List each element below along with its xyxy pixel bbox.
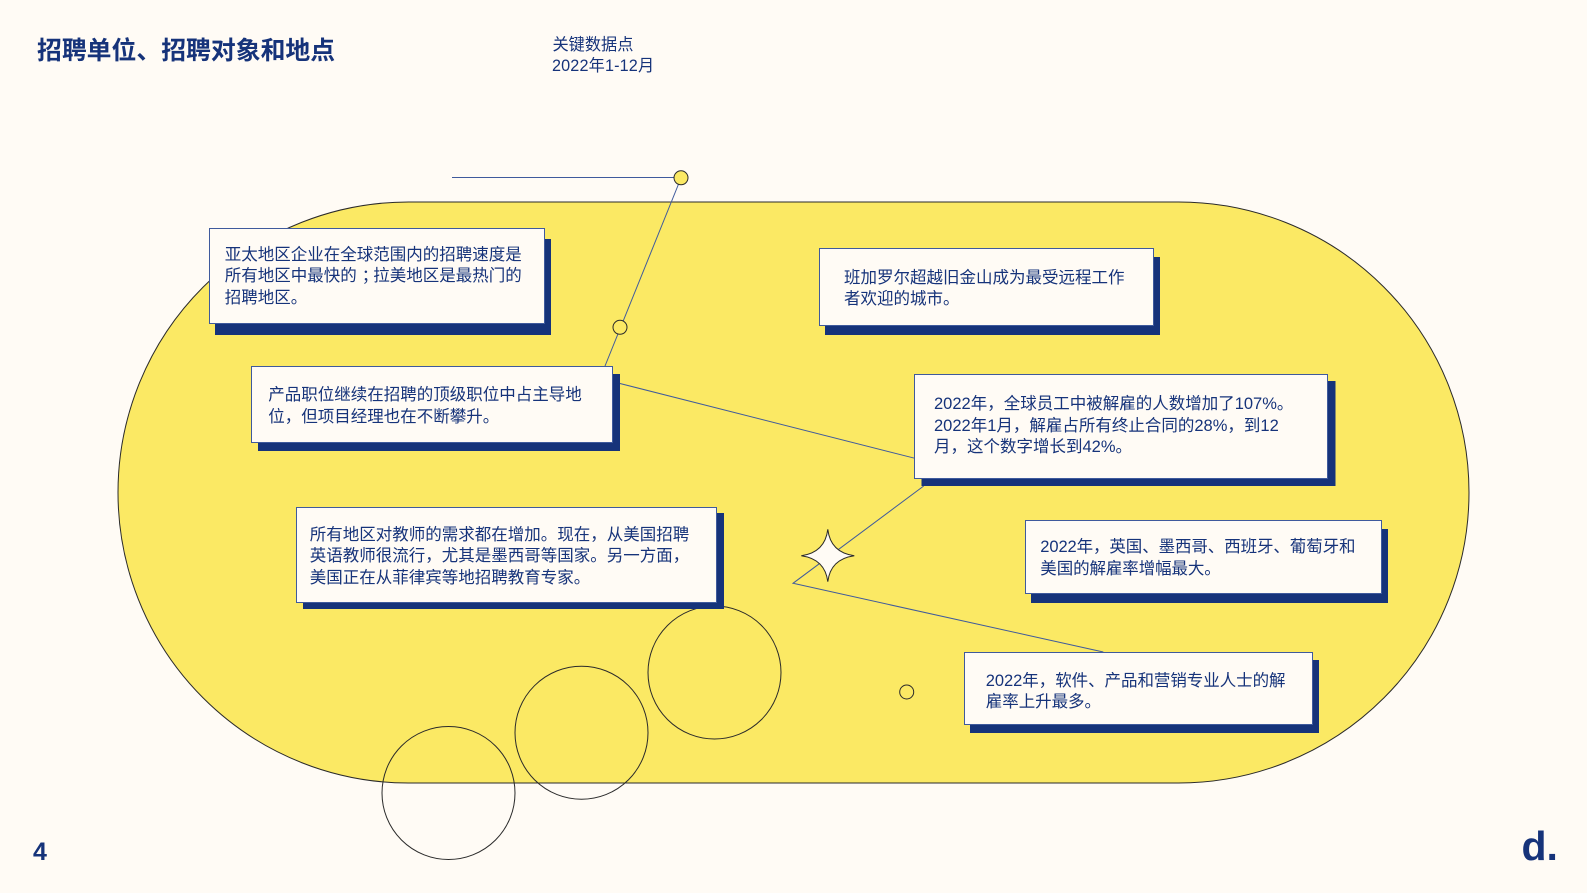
- subtitle: key data points and date range: [552, 36, 654, 75]
- logo: d.: [1522, 823, 1558, 869]
- subtitle: key data points and date range: 关键数据点: [552, 36, 633, 54]
- callout: global layoffs: [914, 374, 1328, 479]
- callout: professions with highest layoff rate: [964, 652, 1312, 725]
- middle connector node: [613, 320, 627, 334]
- callout: countries with biggest layoff increase: [1025, 520, 1382, 594]
- page number: 4: [33, 838, 47, 866]
- top connector node: [674, 171, 688, 185]
- callout text: 所有地区对教师的需求都在增加。现在，从美国招聘: [310, 526, 689, 544]
- icon: four-point star: [801, 529, 854, 582]
- callout text: [986, 672, 1286, 711]
- subtitle: key data points and date range: 2022年1-12月: [552, 57, 654, 75]
- callout: product roles: [251, 366, 613, 443]
- connector lines: [452, 178, 1103, 652]
- callout text: [225, 246, 522, 306]
- callout text: 英语教师很流行，尤其是墨西哥等国家。另一方面，: [310, 547, 689, 565]
- callout text: 2022年，软件、产品和营销专业人士的解: [986, 672, 1286, 690]
- callout text: 班加罗尔超越旧金山成为最受远程工作: [844, 269, 1124, 287]
- callout: Bangalore: [819, 248, 1154, 326]
- callout: Asia-Pacific hiring speed: [209, 228, 545, 324]
- callout text: 2022年，全球员工中被解雇的人数增加了107%。: [934, 395, 1293, 413]
- callout text: [310, 526, 689, 587]
- callout: teacher demand: [296, 507, 717, 603]
- callout text: 招聘地区。: [225, 288, 307, 306]
- callout text: 所有地区中最快的 ；拉美地区是最热门的: [225, 267, 522, 285]
- callout text: [268, 386, 582, 426]
- title: 招聘单位、招聘对象和地点: [37, 38, 335, 65]
- callout text: 美国的解雇率增幅最大。: [1040, 560, 1221, 578]
- callout text: 2022年，英国、墨西哥、西班牙、葡萄牙和: [1040, 538, 1355, 556]
- decorative outline circles: [382, 606, 781, 860]
- callout text: [934, 394, 1293, 456]
- yellow pill panel: [118, 202, 1469, 783]
- callout text: 产品职位继续在招聘的顶级职位中占主导地: [268, 386, 582, 404]
- callout text: [1040, 538, 1355, 578]
- callout text: 位，但项目经理也在不断攀升。: [268, 408, 499, 426]
- callout text: [844, 268, 1124, 308]
- callout text: 月，这个数字增长到42%。: [934, 438, 1132, 456]
- callout text: 亚太地区企业在全球范围内的招聘速度是: [225, 246, 522, 264]
- callout text: 雇率上升最多。: [986, 693, 1101, 711]
- callout text: 者欢迎的城市。: [844, 290, 959, 308]
- callout text: 2022年1月，解雇占所有终止合同的28%，到12: [934, 417, 1279, 435]
- small node near bottom box: [900, 685, 914, 699]
- callout text: 美国正在从菲律宾等地招聘教育专家。: [310, 569, 590, 587]
